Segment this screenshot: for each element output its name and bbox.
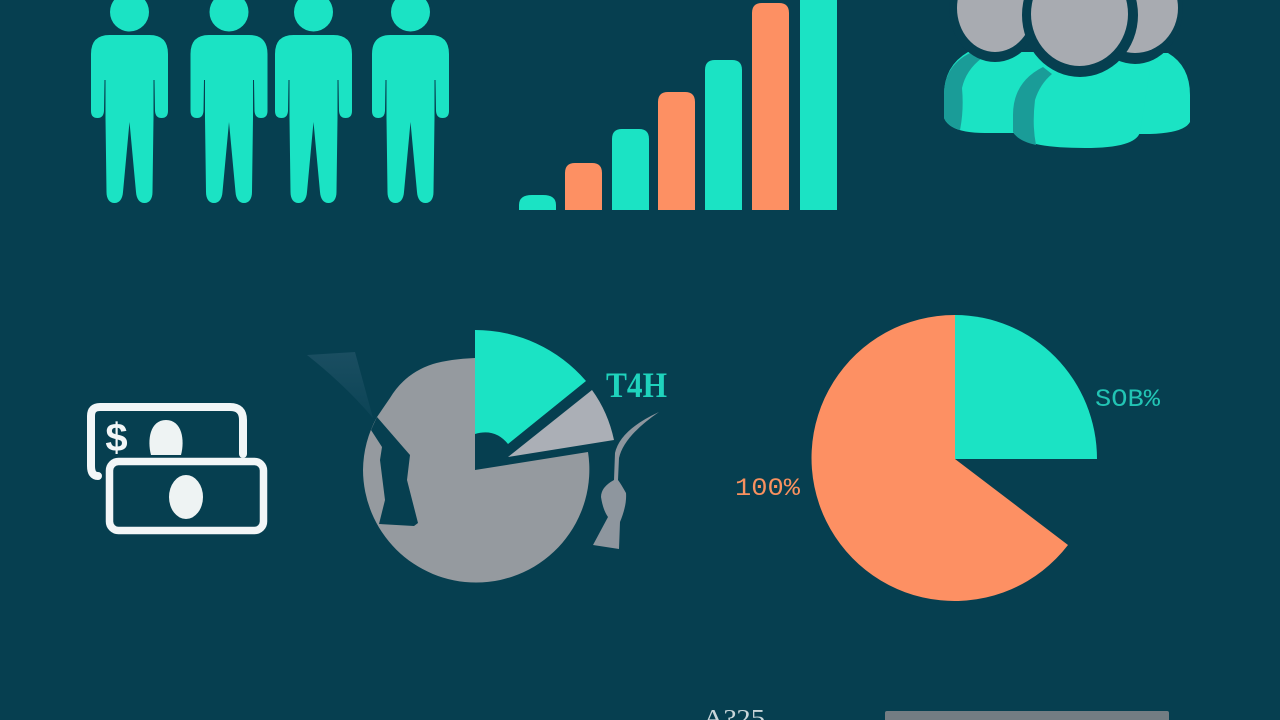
icon: user group [944, 0, 1190, 148]
back-left body shade [944, 53, 982, 130]
bar 6 [752, 3, 789, 210]
label: orange percentage: 100% [735, 474, 801, 503]
person 4 [372, 0, 449, 203]
orange slice [812, 315, 1068, 601]
person 1 [91, 0, 168, 203]
back banknote [91, 407, 243, 476]
dollar sign: $ [105, 416, 128, 460]
label: garbled teal value: T4H [606, 365, 667, 405]
front banknote [110, 462, 264, 530]
front body shade [1013, 67, 1052, 145]
bar 2 [565, 163, 602, 210]
bar 3 [612, 129, 649, 210]
person 2 [190, 0, 268, 203]
front user body [1013, 66, 1150, 148]
teal slice [955, 315, 1097, 459]
front user head [1031, 0, 1128, 66]
back-left head ring [949, 0, 1041, 62]
bar 4 [658, 92, 695, 210]
back banknote oval [149, 420, 183, 455]
label: teal percentage: SOB% [1095, 385, 1161, 414]
light grey pie slice [508, 390, 614, 457]
back-right user head [1092, 0, 1178, 53]
back-right head ring [1087, 0, 1183, 64]
bar 7 [800, 0, 837, 210]
icon: row of four people [91, 0, 449, 203]
chart: grey pie with teal slice [307, 330, 659, 583]
person 3 [275, 0, 352, 203]
grey pie body [363, 358, 589, 583]
bar 1 [519, 195, 556, 210]
teal pie slice [475, 330, 586, 444]
bottom grey bar [885, 711, 1169, 720]
front head dark ring [1022, 0, 1138, 77]
bar chart [519, 0, 837, 210]
chart: orange and teal pie [812, 315, 1097, 601]
dark keyhole cutout [371, 417, 418, 526]
squiggle pointer [593, 412, 659, 549]
faint triangle pointer [307, 352, 373, 418]
icon: banknotes [91, 407, 264, 530]
bar 5 [705, 60, 742, 210]
front banknote oval [169, 475, 203, 519]
back-right user body [1100, 53, 1190, 134]
back-left user body [944, 52, 1060, 133]
back-left user head [957, 0, 1033, 52]
